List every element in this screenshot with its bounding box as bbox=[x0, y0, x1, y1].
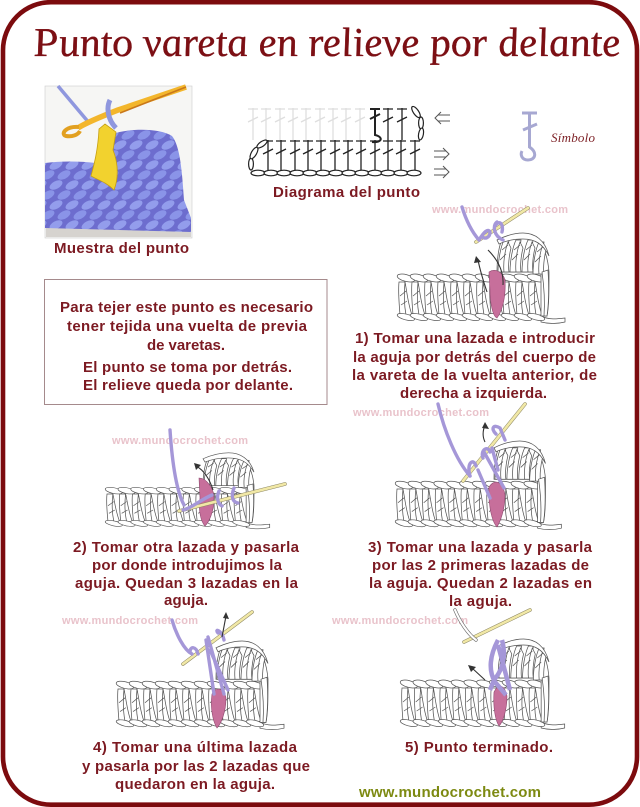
step 5 text: 5) Punto terminado. bbox=[405, 739, 553, 756]
step 4 text: y pasarla por las 2 lazadas que bbox=[82, 758, 310, 775]
title: Punto vareta en relieve por delante bbox=[29, 19, 623, 65]
step 1 text bbox=[352, 330, 597, 402]
step 2 text: 2) Tomar otra lazada y pasarla bbox=[73, 539, 300, 556]
step 4 text bbox=[82, 739, 310, 793]
watermark 3: www.mundocrochet.com bbox=[111, 435, 248, 447]
faded upper row bbox=[248, 108, 365, 140]
intro text: de varetas. bbox=[147, 337, 225, 354]
intro text: tener tejida una vuelta de previa bbox=[67, 318, 308, 335]
step 4 text: quedaron en la aguja. bbox=[115, 776, 275, 793]
step 2 text: por donde introdujimos la bbox=[92, 557, 283, 574]
step 1 text: 1) Tomar una lazada e introducir bbox=[355, 330, 595, 347]
step 2 text: aguja. Quedan 3 lazadas en la bbox=[75, 575, 299, 592]
panel: intro note bbox=[44, 280, 327, 404]
step 5 illustration bbox=[399, 610, 565, 730]
chain row bbox=[248, 105, 424, 176]
website footer: www.mundocrochet.com bbox=[358, 784, 541, 801]
caption: diagram: Diagrama del punto bbox=[273, 184, 420, 201]
watermark 5: www.mundocrochet.com bbox=[331, 615, 468, 627]
caption: sample: Muestra del punto bbox=[54, 240, 189, 257]
intro text: El relieve queda por delante. bbox=[83, 377, 293, 394]
step 1 text: la aguja por detrás del cuerpo de bbox=[353, 349, 596, 366]
step 2 illustration bbox=[104, 430, 285, 529]
step 2 text bbox=[73, 539, 300, 609]
intro text bbox=[60, 299, 313, 394]
icon: stitch symbol bbox=[521, 113, 537, 160]
row direction arrows bbox=[434, 112, 450, 178]
upper row dark posts bbox=[370, 108, 407, 142]
step 1 text: la vareta de la vuelta anterior, de bbox=[352, 367, 597, 384]
watermark 2: www.mundocrochet.com bbox=[352, 407, 489, 419]
step 3 text: la aguja. bbox=[449, 593, 512, 610]
watermark 1: www.mundocrochet.com bbox=[431, 204, 568, 216]
step 4 text: 4) Tomar una última lazada bbox=[93, 739, 298, 756]
step 3 illustration bbox=[394, 404, 561, 530]
label: symbol: Símbolo bbox=[551, 130, 596, 145]
photo: crochet sample bbox=[45, 86, 192, 238]
stitch diagram bbox=[248, 105, 450, 178]
step 3 text: la aguja. Quedan 2 lazadas en bbox=[369, 575, 592, 592]
intro text: El punto se toma por detrás. bbox=[83, 359, 292, 376]
lower row posts bbox=[263, 140, 420, 172]
step 3 text bbox=[368, 539, 593, 610]
step 3 text: por las 2 primeras lazadas de bbox=[372, 557, 589, 574]
watermark 4: www.mundocrochet.com bbox=[61, 615, 198, 627]
step 3 text: 3) Tomar una lazada y pasarla bbox=[368, 539, 593, 556]
intro text: Para tejer este punto es necesario bbox=[60, 299, 313, 316]
step 1 text: derecha a izquierda. bbox=[400, 385, 547, 402]
step 2 text: aguja. bbox=[164, 592, 208, 609]
step 4 illustration bbox=[115, 612, 284, 730]
step 1 illustration bbox=[396, 207, 565, 324]
